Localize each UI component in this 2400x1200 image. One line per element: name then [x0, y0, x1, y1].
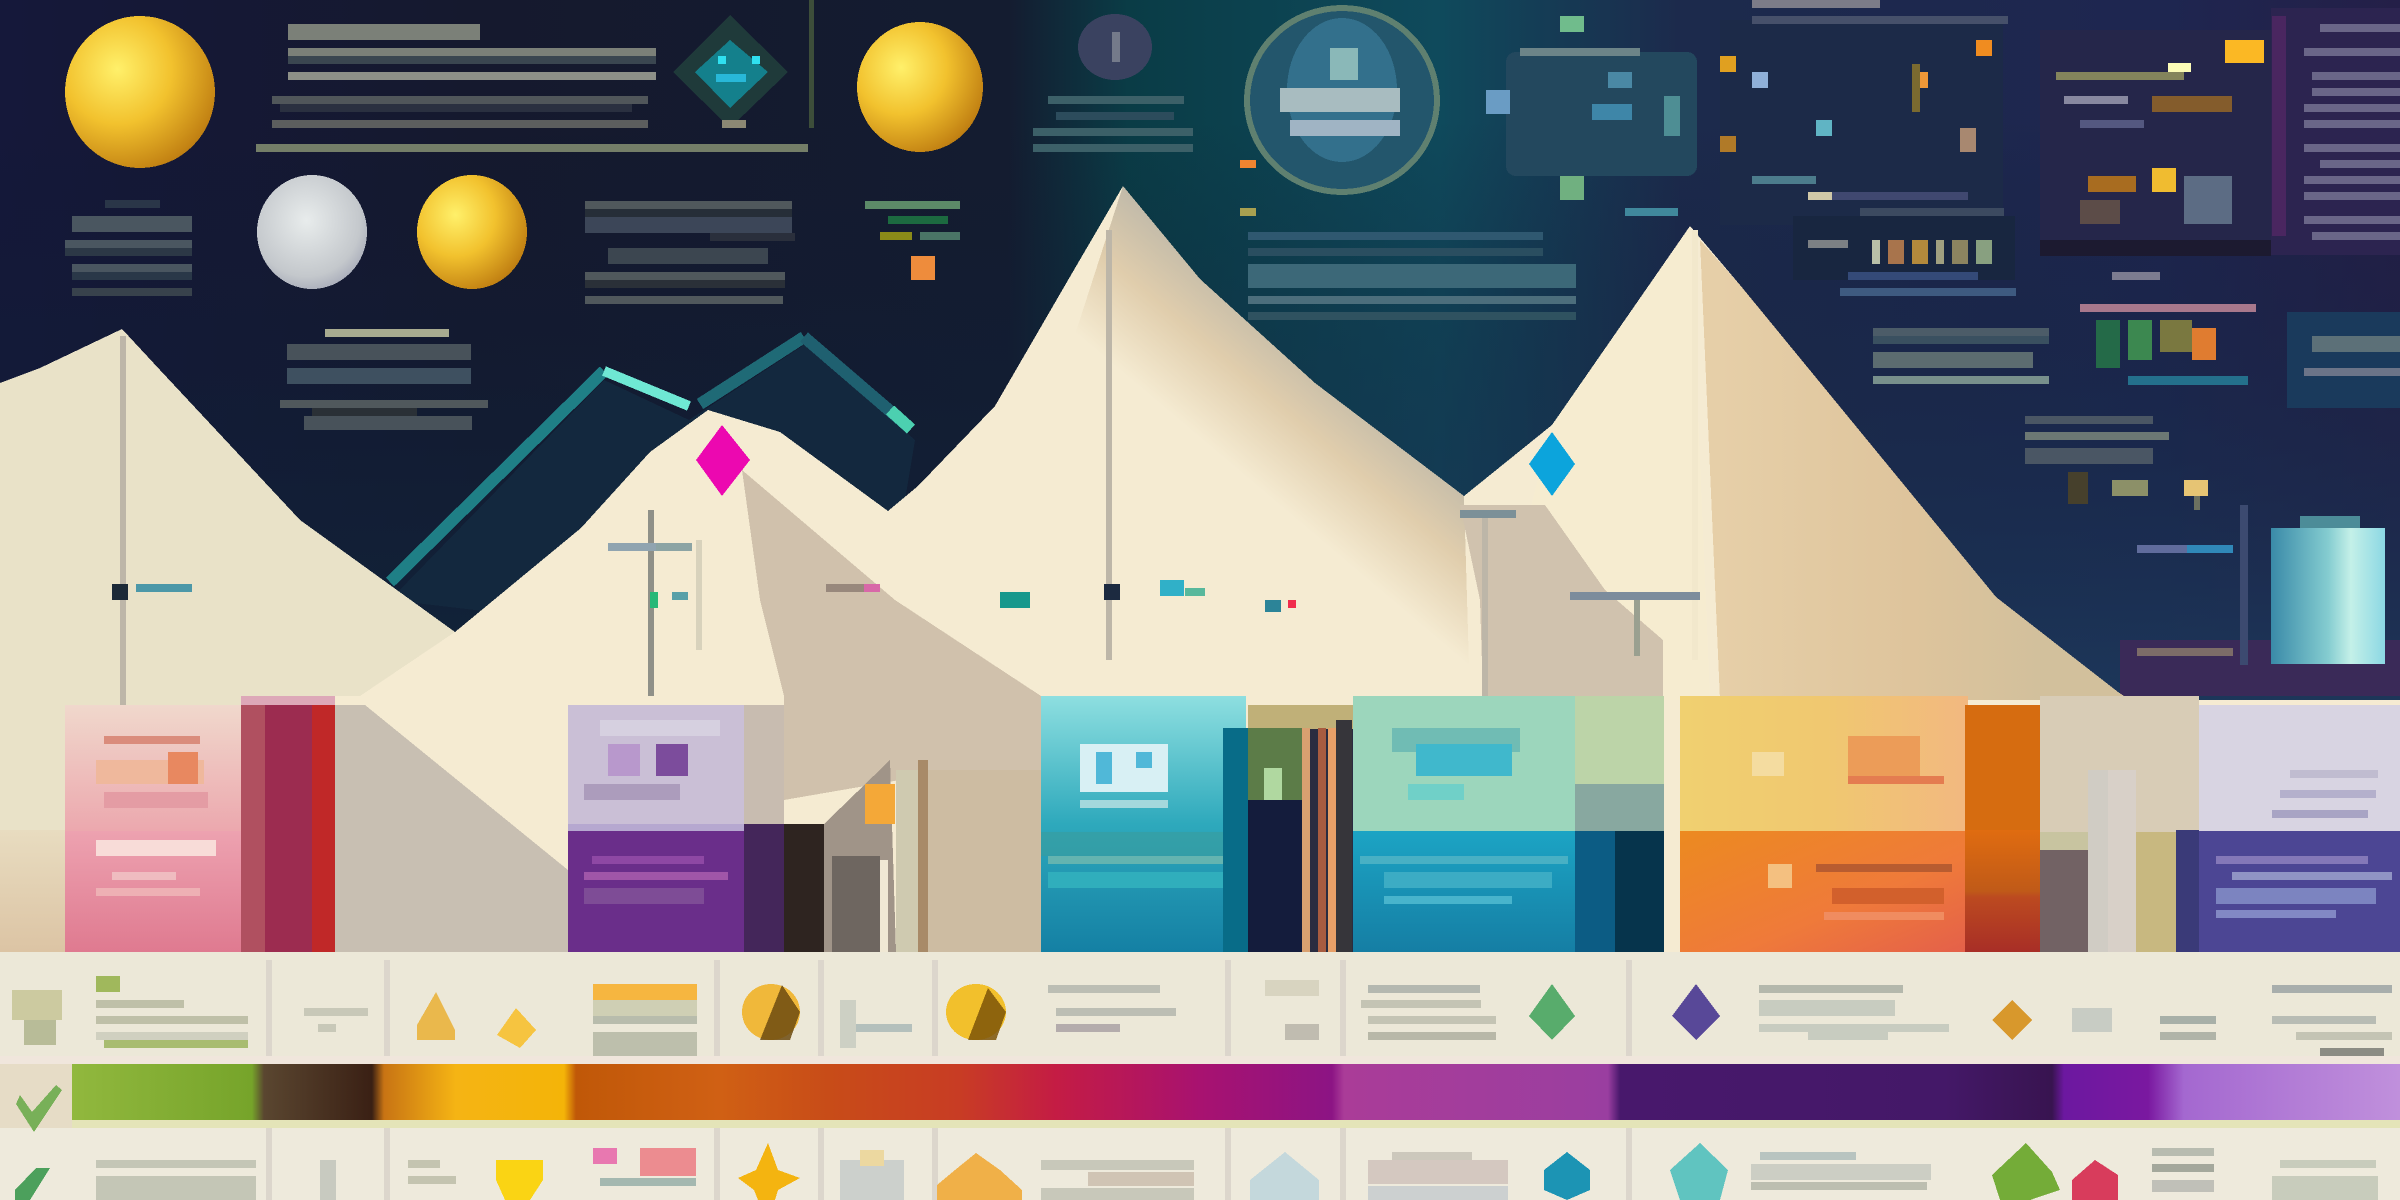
marker: teal bar: [1625, 208, 1678, 216]
text block: pink heading row 2: [593, 1148, 696, 1186]
label: small grey tag: [2112, 272, 2160, 280]
divider bar: olive: [256, 144, 808, 152]
panel: rounded chart box: [1486, 48, 1697, 200]
icon: mint gem: [1670, 1143, 1728, 1200]
marker: orange: [1240, 160, 1256, 168]
mountains: lower left tan: [0, 830, 65, 952]
icon: green check band: [16, 1085, 62, 1132]
line chart: teal peaks: [390, 337, 915, 620]
marker: olive: [1240, 208, 1256, 216]
icon: grey yellow glyph: [840, 1150, 904, 1200]
panel: striped data box: [1793, 216, 2016, 296]
icon: green small glyph: [865, 201, 960, 240]
icon: red gem: [2072, 1160, 2118, 1200]
chart panel: circular badge: [1247, 8, 1437, 192]
icon: grey cream glyph: [1265, 980, 1319, 1040]
dividers: [266, 960, 1632, 1200]
chart: small bars beside cylinder: [2137, 505, 2248, 665]
mountains: left peak shading: [0, 329, 455, 952]
text block: lower dashboard: [1873, 328, 2049, 384]
icon: gold star: [738, 1143, 800, 1200]
marker: blue diamond: [1529, 432, 1575, 496]
marker: pink diamond: [696, 425, 750, 496]
icon: yellow block: [496, 1160, 543, 1200]
icon: olive check: [12, 990, 62, 1045]
panel: right card: [2040, 30, 2271, 256]
text block: row 1 fourth: [1048, 985, 1176, 1032]
text block: row 1 seventh: [2272, 985, 2392, 1056]
text block: row 1 first: [96, 976, 248, 1048]
panel: orange card: [1680, 696, 2040, 952]
mountains: cream silhouette: [0, 186, 2400, 960]
text block: row 1 short: [304, 1008, 368, 1032]
mountains: fourth peak lit face: [1525, 226, 1710, 700]
icon: green gem: [1529, 984, 1575, 1040]
panel: teal card: [1041, 696, 1248, 952]
icon: grey pencil post: [824, 760, 1041, 952]
icon: gold nugget pair: [417, 992, 536, 1048]
coin: gold dark row 1 first: [742, 984, 800, 1040]
icon: teal cylinder: [2271, 516, 2385, 664]
text block: row 1 sixth: [1759, 985, 1949, 1040]
icon: gold cloud: [937, 1153, 1022, 1200]
row: upper cream legend: [0, 952, 2400, 1064]
text block: top left heading: [272, 24, 656, 128]
text block: left caption: [65, 200, 192, 296]
panel: dark striped column: [1248, 705, 1353, 952]
text block: teal caption: [1248, 232, 1576, 320]
text block: row 1 small: [840, 1000, 912, 1048]
coin: gold dark row 1 second: [946, 984, 1006, 1040]
text block: row 2 small right: [2152, 1148, 2214, 1192]
icon: teal crystal: [673, 15, 788, 128]
text block: centre caption: [585, 201, 795, 304]
icon: dark badge: [1078, 14, 1152, 80]
mast lines: [120, 230, 1698, 706]
icon: green check lower: [15, 1168, 50, 1200]
panel: dashboard dark: [1720, 0, 2008, 225]
text block: row 2 seventh: [2272, 1160, 2378, 1200]
chart: green digits: [2080, 304, 2256, 385]
icon: green tree: [1992, 1143, 2060, 1200]
icon: light blue cloud: [1250, 1152, 1319, 1200]
text block: row 1 small right: [2072, 1008, 2216, 1040]
mountains: tan behind post: [2040, 696, 2199, 832]
text block: orange heading row 1: [593, 984, 697, 1056]
coin: silver: [257, 175, 367, 289]
icon: gold gem: [1992, 1000, 2032, 1040]
panel: purple card: [568, 705, 824, 952]
row: rainbow band: [0, 1056, 2400, 1136]
panel: pink card: [65, 696, 335, 952]
text block: row 2 rose: [1368, 1152, 1508, 1200]
icon: grey mark: [320, 1160, 336, 1200]
panel: mint and blue card: [1353, 696, 1664, 952]
text block: lower left caption: [280, 329, 488, 430]
text block: row 2 sixth: [1751, 1152, 1931, 1190]
mountains: third peak right shade: [1041, 186, 1470, 700]
mountains: tan facet at fourth peak base: [1460, 505, 1663, 696]
coin: gold small: [417, 175, 527, 289]
icon: teal gem: [1544, 1152, 1590, 1200]
text block: lower right: [2025, 416, 2169, 464]
callout bars on mountains: [112, 510, 1700, 612]
row: lower cream legend: [0, 1120, 2400, 1200]
icon: purple gem: [1672, 984, 1720, 1040]
vertical rule: [809, 0, 814, 128]
panel: lavender card: [2176, 705, 2400, 952]
icon: small orange marker: [911, 256, 935, 280]
text block: row 2 first: [96, 1160, 256, 1200]
panel: purple sidebar: [2271, 8, 2400, 255]
icon: grey post with gold base: [2040, 770, 2176, 952]
text block: row 2 tan: [1041, 1160, 1194, 1200]
text block: row 1 fifth: [1361, 985, 1496, 1040]
mountains: shadow under valley: [335, 705, 568, 952]
icons: small row: [2068, 472, 2208, 510]
coin: gold top centre: [857, 22, 983, 152]
panel: blue side box: [2287, 312, 2400, 408]
coin: large gold top left: [65, 16, 215, 168]
text block: under dark badge: [1033, 96, 1193, 152]
mountains: fourth peak shaded face: [1700, 240, 2130, 700]
text block: row 2 short: [408, 1160, 456, 1184]
mountains: second peak shadow: [742, 470, 1041, 952]
marker: green: [1560, 16, 1584, 32]
